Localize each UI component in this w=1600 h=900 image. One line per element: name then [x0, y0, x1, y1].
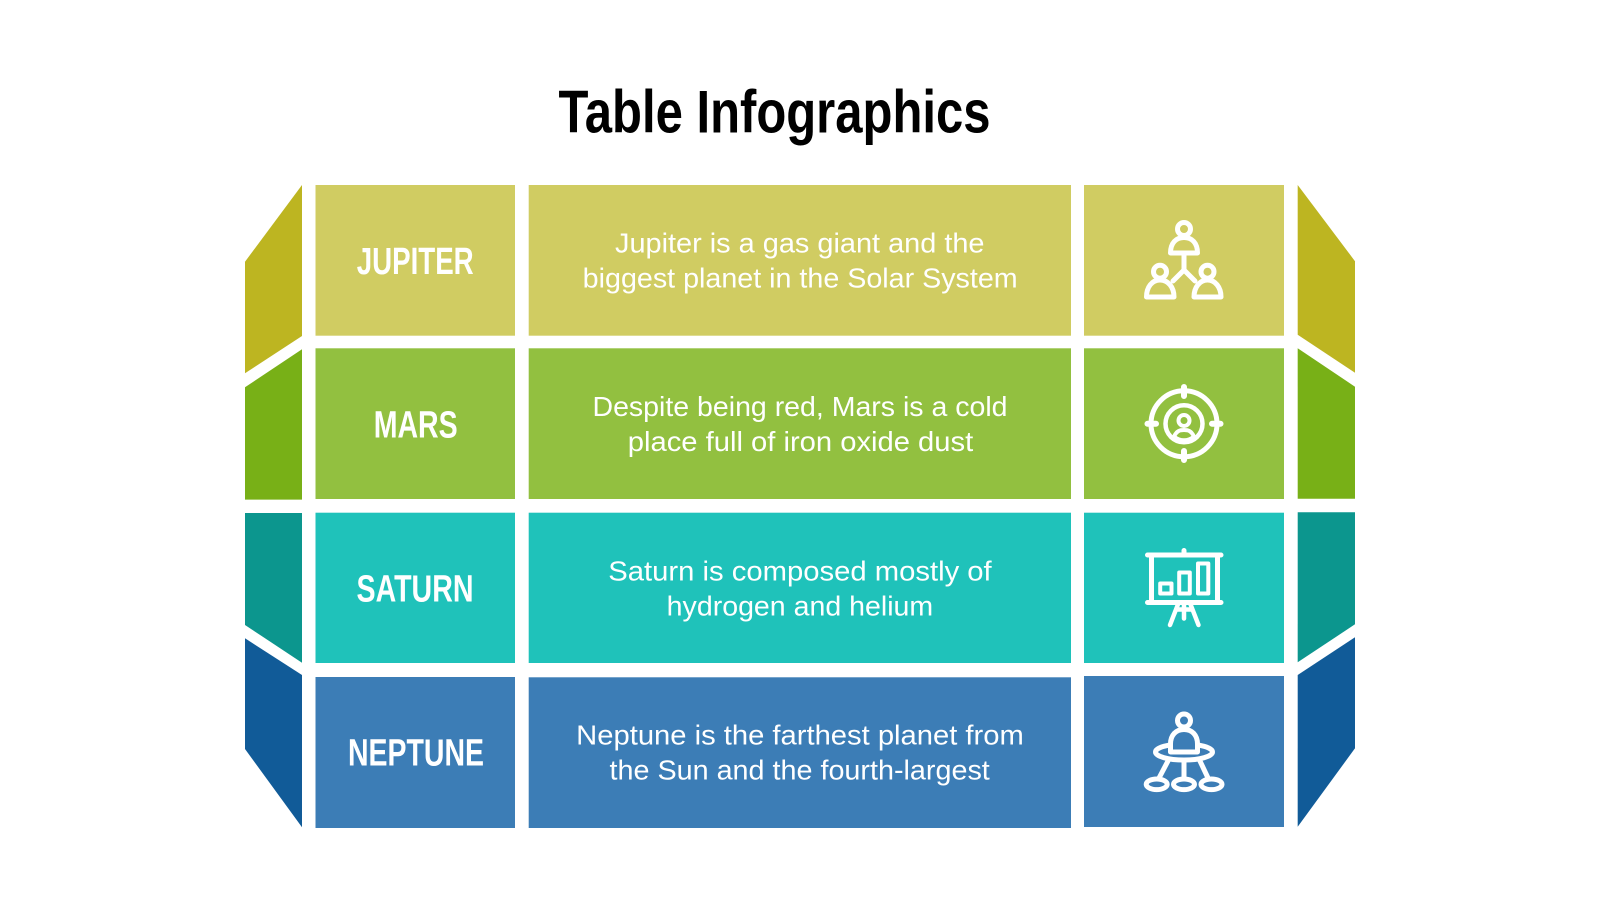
icon cell	[1084, 676, 1284, 827]
description text: the Sun and the fourth-largest	[610, 754, 990, 785]
right side facet	[1298, 512, 1355, 662]
description text: Saturn is composed mostly of	[608, 556, 992, 587]
icon: team hierarchy	[1146, 222, 1221, 297]
panel: Saturn row	[245, 512, 1355, 663]
icon cell	[1084, 348, 1284, 499]
name cell	[316, 185, 515, 336]
icon: presentation board	[1148, 550, 1221, 625]
description text	[608, 556, 992, 622]
right side facet	[1298, 348, 1355, 499]
name cell	[316, 513, 515, 663]
description text: Jupiter is a gas giant and the	[615, 228, 984, 259]
description text: Neptune is the farthest planet from	[576, 719, 1024, 750]
description cell	[529, 185, 1071, 336]
right side facet	[1298, 637, 1355, 827]
description cell	[529, 513, 1071, 663]
panel: Neptune row	[245, 637, 1355, 828]
name label: MARS	[374, 404, 458, 446]
icon: target person	[1148, 387, 1220, 460]
description text: biggest planet in the Solar System	[583, 263, 1018, 294]
name cell	[316, 677, 515, 828]
name label: JUPITER	[357, 241, 474, 283]
left side facet	[245, 638, 302, 827]
description text	[576, 719, 1024, 785]
description cell	[529, 348, 1071, 499]
description text	[583, 228, 1018, 294]
name label: SATURN	[356, 568, 474, 610]
description text: hydrogen and helium	[667, 591, 933, 622]
description text	[592, 391, 1008, 457]
description text: Despite being red, Mars is a cold	[592, 391, 1008, 422]
description text: place full of iron oxide dust	[628, 426, 973, 457]
icon cell	[1084, 185, 1284, 336]
name label: NEPTUNE	[348, 732, 484, 774]
right side facet	[1298, 185, 1355, 373]
panel: Jupiter row	[245, 185, 1355, 373]
name cell	[316, 348, 515, 499]
left side facet	[245, 349, 302, 500]
panel: Mars row	[245, 348, 1355, 500]
title: Table Infographics	[558, 79, 990, 146]
icon: network user	[1146, 714, 1222, 790]
left side facet	[245, 185, 302, 373]
icon cell	[1084, 513, 1284, 663]
left side facet	[245, 513, 302, 663]
description cell	[529, 677, 1071, 828]
